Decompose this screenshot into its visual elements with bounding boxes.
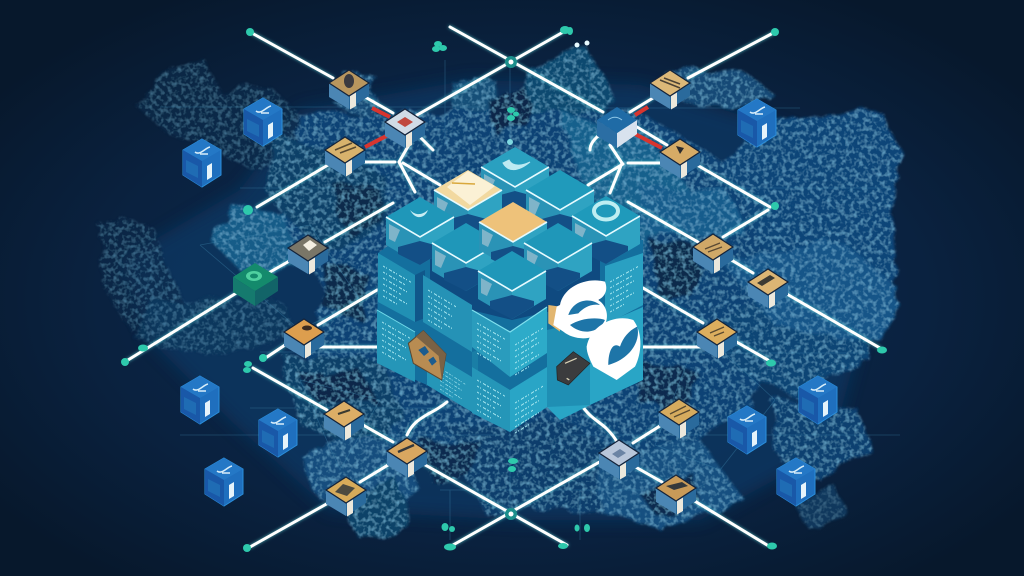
bottom cross	[420, 460, 603, 545]
cube: left grey with white block	[288, 235, 328, 274]
cube: top right blue	[597, 107, 637, 148]
central cube stack	[377, 147, 643, 433]
faint network grid lines	[160, 60, 900, 540]
dark fragments	[330, 180, 385, 235]
icon cube: lower right c	[777, 458, 815, 506]
left junction	[399, 137, 440, 192]
block: back right upper	[605, 253, 643, 325]
block: front centre upper	[472, 307, 547, 377]
cube: right gold upper	[660, 139, 700, 178]
cube: gold left-mid	[284, 319, 324, 358]
cube: bottom right gold	[656, 475, 696, 514]
icon cube: lower left a	[181, 376, 219, 424]
left spokes	[128, 162, 395, 360]
right junction	[588, 133, 662, 193]
cube: bottom left gold	[326, 477, 366, 516]
glass cube: ring icon	[572, 196, 640, 264]
icon: tick on back cube	[503, 160, 530, 170]
icon cube: upper left b	[183, 139, 221, 187]
block: back right lower	[547, 307, 643, 420]
cube: green	[233, 263, 278, 306]
cube: top-left light	[385, 109, 425, 148]
cube: lower left gold	[324, 401, 364, 440]
icon: large white logo	[548, 280, 640, 380]
icon: book badge	[408, 331, 446, 380]
block: front centre lower	[472, 367, 547, 433]
glass cube: front	[478, 251, 546, 319]
cube: lower right gold	[659, 399, 699, 438]
glass cube: teal back right	[526, 170, 594, 238]
icon cube: lower left c	[205, 458, 243, 506]
network connector lines	[128, 27, 880, 547]
cube: top-left dark gold	[329, 70, 369, 110]
blue hex cubes	[181, 98, 837, 506]
block: back left upper	[378, 253, 425, 322]
top cross	[417, 27, 603, 115]
teal end nodes	[121, 26, 887, 552]
block: back left lower	[377, 310, 415, 382]
red cables	[365, 107, 662, 148]
block: middle left	[423, 275, 472, 352]
icon cube: lower right a	[799, 376, 837, 424]
cube stack base silhouette	[377, 230, 643, 432]
glass cube: right middle	[524, 223, 592, 291]
glass cube: gold top	[479, 202, 547, 270]
icon cube: lower left b	[259, 409, 297, 457]
glass cube row: top	[481, 147, 549, 215]
glass cube: left middle	[432, 223, 500, 291]
glass cube: left with bird glyph	[386, 197, 454, 265]
cube: right gold middle	[693, 234, 733, 274]
cube: lower right light	[599, 440, 639, 480]
right spokes	[628, 165, 880, 360]
cube: left gold	[325, 137, 365, 176]
connector cubes	[233, 70, 788, 516]
icon: dark chip	[557, 352, 590, 385]
top-left and top-right spokes	[250, 32, 775, 145]
glass cube: cream top	[434, 170, 502, 238]
block: lower left	[427, 350, 478, 412]
icon cube: upper left a	[244, 98, 282, 146]
cube: lower left junction	[387, 438, 427, 478]
icon cube: lower right b	[728, 406, 766, 454]
cube: right gold far	[748, 269, 788, 308]
cube: right gold lower	[697, 319, 737, 358]
background: world map blobs	[100, 50, 900, 540]
cube: top right gold	[650, 70, 690, 110]
lower spokes	[580, 403, 767, 545]
icon cube: upper right	[738, 99, 776, 147]
